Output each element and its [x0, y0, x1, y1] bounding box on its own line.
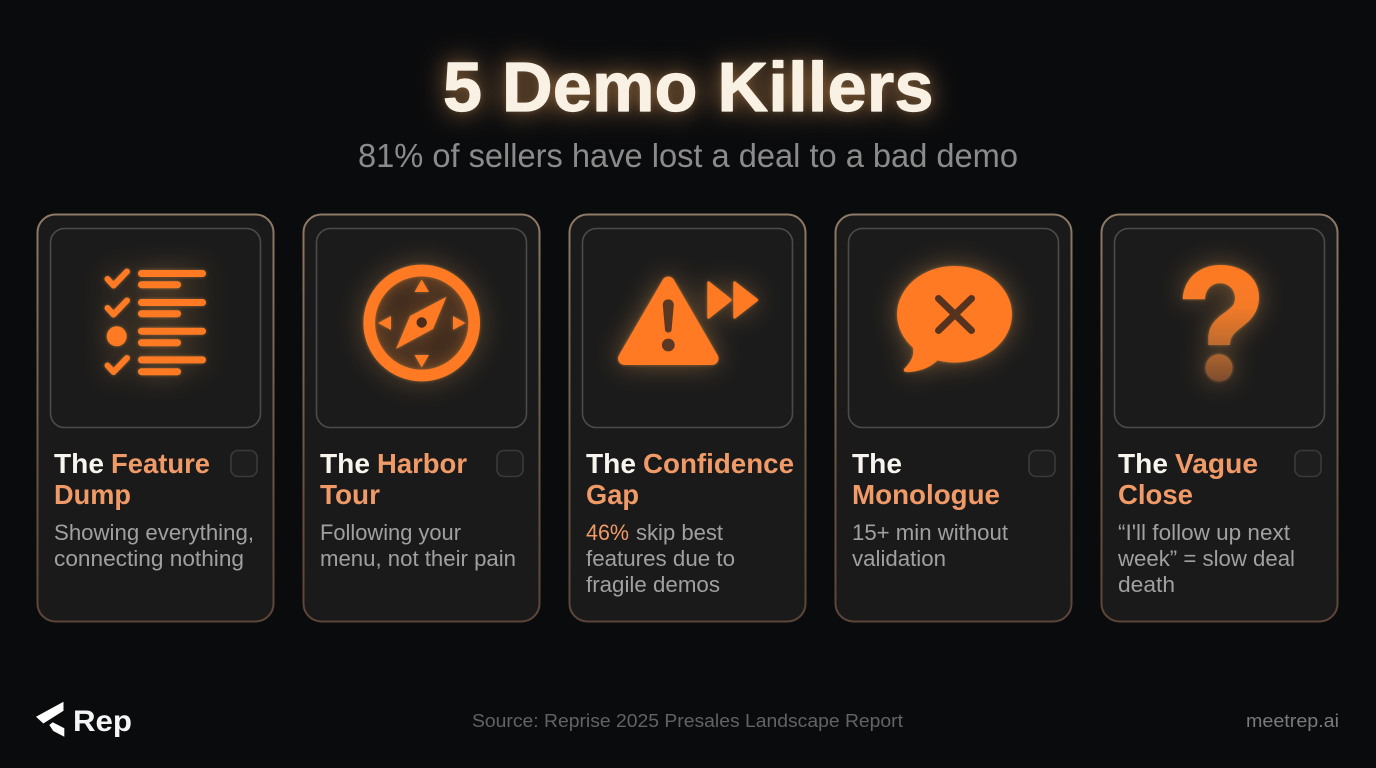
card description: skip best	[636, 520, 723, 545]
card description: fragile demos	[586, 572, 720, 597]
card heading: Harbor	[377, 448, 467, 479]
card description	[852, 520, 1008, 571]
card description: “I'll follow up next	[1118, 520, 1290, 545]
card heading	[586, 448, 794, 510]
subtitle: 81% of sellers have lost a deal to a bad demo	[358, 137, 1018, 174]
panel: The Confidence Gap	[570, 214, 806, 622]
panel: The Harbor Tour	[304, 214, 540, 622]
wordmark: Rep	[73, 705, 132, 738]
checkbox	[231, 450, 257, 476]
card heading	[852, 448, 1000, 510]
card heading	[54, 448, 210, 510]
card description: validation	[852, 546, 946, 571]
card description: week” = slow deal	[1117, 546, 1295, 571]
card heading: Gap	[586, 479, 639, 510]
card description: Following your	[320, 520, 461, 545]
icon: question mark	[1183, 265, 1259, 381]
card description: menu, not their pain	[320, 546, 516, 571]
icon: compass	[369, 270, 474, 376]
card heading: Close	[1118, 479, 1193, 510]
compass dial	[374, 275, 470, 371]
card heading: The	[320, 448, 370, 479]
card heading: Vague	[1175, 448, 1258, 479]
card heading: The	[1118, 448, 1168, 479]
card description: features due to	[586, 546, 735, 571]
card heading: Confidence	[643, 448, 794, 479]
icon: Rep mark	[36, 702, 64, 737]
card description: Showing everything,	[54, 520, 254, 545]
exclamation mark	[662, 299, 675, 351]
source note: Source: Reprise 2025 Presales Landscape Report	[472, 710, 903, 731]
card heading	[1118, 448, 1258, 510]
checkbox	[497, 450, 523, 476]
checkbox	[1029, 450, 1055, 476]
icon: checklist	[107, 270, 206, 375]
website: meetrep.ai	[1246, 710, 1339, 731]
panel: The Vague Close	[1102, 214, 1338, 622]
card heading: The	[54, 448, 104, 479]
card description: 15+ min without	[852, 520, 1008, 545]
card description: 46%	[586, 520, 629, 545]
panel: The Monologue	[836, 214, 1072, 622]
card heading: Feature	[111, 448, 210, 479]
card heading: The	[852, 448, 902, 479]
card description	[1117, 520, 1295, 597]
compass hub	[416, 317, 427, 328]
card heading: Tour	[320, 479, 380, 510]
card description: death	[1118, 572, 1175, 597]
X mark	[938, 298, 972, 330]
card heading: Monologue	[852, 479, 1000, 510]
card heading	[320, 448, 467, 510]
card heading: Dump	[54, 479, 131, 510]
checkbox	[1295, 450, 1321, 476]
card heading: The	[586, 448, 636, 479]
icon: speech bubble with X	[897, 266, 1012, 372]
card description	[54, 520, 254, 571]
title: 5 Demo Killers	[443, 48, 934, 126]
card description	[586, 520, 735, 597]
logo: Rep	[36, 702, 132, 738]
card description: connecting nothing	[54, 546, 244, 571]
card description	[320, 520, 516, 571]
icon: warning triangle with fast-forward	[624, 282, 757, 358]
panel: The Feature Dump	[38, 214, 274, 622]
